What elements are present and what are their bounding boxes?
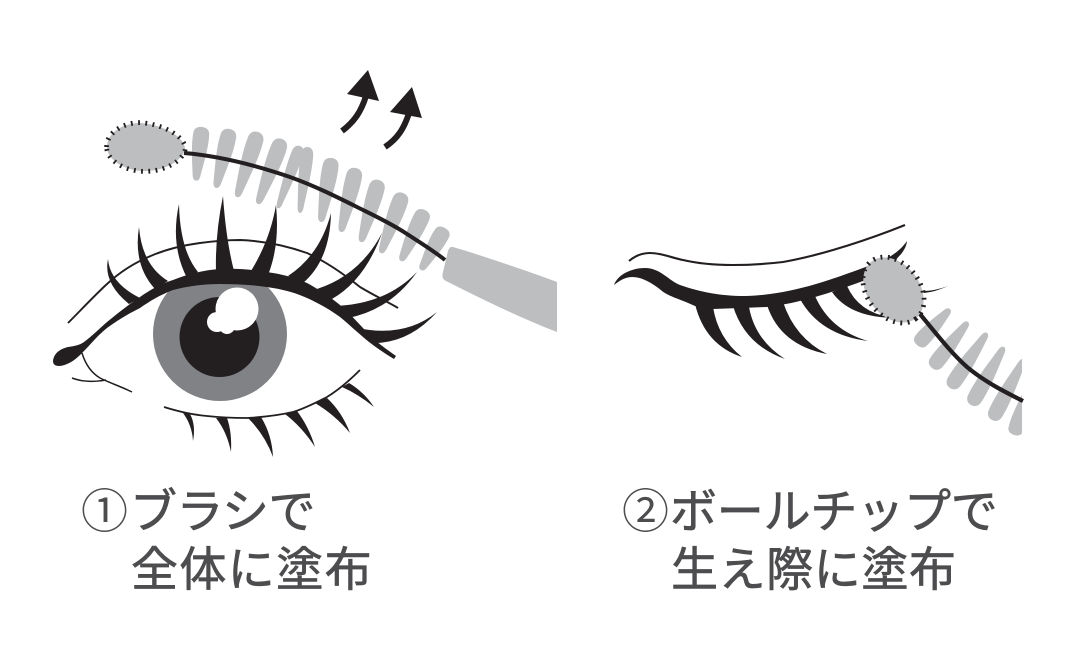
brush handle: [442, 247, 557, 332]
eye: open eye with lashes: [53, 196, 437, 457]
eyelid crease: [68, 240, 398, 323]
caption: step 2: 生え際に塗布: [671, 543, 957, 596]
inner eye corner lines: [72, 353, 132, 392]
caption: step 1: ①: [81, 485, 128, 538]
upper lashes: [107, 196, 437, 343]
caption: step 1: 全体に塗布: [131, 543, 373, 596]
lashes: [695, 286, 948, 359]
panel: step 1 illustration: [53, 70, 557, 457]
ball tip: [851, 246, 936, 334]
brush bristles: [188, 126, 452, 274]
ball tip: [107, 123, 185, 171]
icon: mascara brush ball tip applied at lash roots: [860, 254, 1024, 436]
brush stem: [915, 308, 1023, 401]
lower lid: [164, 370, 360, 418]
caption: step 1: ブラシで: [130, 485, 315, 538]
brush stem: [184, 153, 445, 260]
caption: step 2: ボールチップで: [670, 485, 998, 538]
lower lashes: [183, 383, 374, 457]
eye: closed eye with lashes: [614, 225, 948, 359]
eyelid crease: [629, 225, 905, 265]
arrows: upward direction: [342, 70, 422, 147]
iris and pupil: [153, 284, 287, 401]
panel: step 2 illustration: [614, 225, 1036, 437]
brush bristles: [914, 308, 1022, 436]
caption: step 1: [81, 485, 373, 596]
caption: step 2: [622, 485, 998, 596]
caption: step 2: ②: [622, 485, 669, 538]
icon: mascara brush with ball tip: [107, 123, 557, 332]
lash line: [614, 241, 907, 309]
upper lash line: [53, 269, 396, 366]
